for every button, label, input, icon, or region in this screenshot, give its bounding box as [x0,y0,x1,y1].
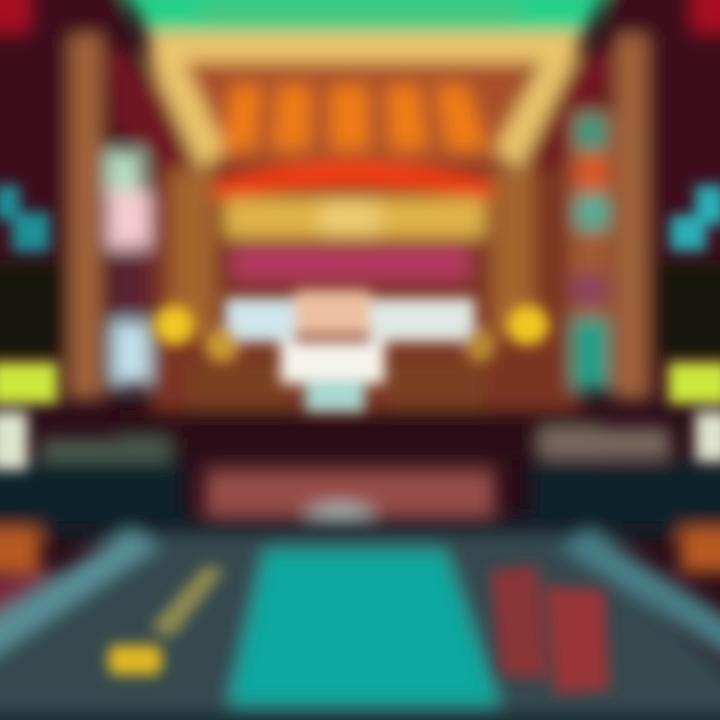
left lower diagonal rail [0,530,160,665]
yellow band [225,198,485,238]
red chip stacks [490,565,610,695]
right white block [695,412,720,462]
right teal ornament [670,185,720,251]
left wall [0,0,120,400]
ceiling orange stripes [222,85,488,150]
right slanted beam [535,50,615,175]
bottom left dark pink [0,570,60,625]
left panel light blue [112,320,150,385]
left slanted beam [105,50,185,175]
yellow floor marking [108,565,225,675]
floor lit spot [298,506,382,538]
yellow lamp right [507,305,549,345]
side sections back room [190,360,290,410]
pink floor [205,470,495,530]
right lime block [668,362,720,404]
yellow lamp left [154,305,194,345]
right wall [610,0,720,400]
right lower diagonal rail [560,530,720,665]
left table [0,462,185,522]
inner right column [492,170,534,335]
left table items [40,438,170,462]
right table items [540,428,670,458]
back room fill [150,40,580,440]
white centre back bar [225,290,475,412]
right table [530,462,720,522]
left lime block [0,362,58,404]
ceiling dark base [190,62,530,165]
teal pool [228,550,500,705]
inner left column [170,170,215,335]
right corner lower [680,528,720,573]
bottom strip [0,712,720,720]
ceiling yellow frame [145,32,585,170]
lower dark base [0,515,720,540]
magenta band [232,248,470,280]
left white block [0,412,28,470]
red arch [212,162,498,200]
yellow lamp inner left [204,327,240,363]
left panel white and pink [106,150,150,315]
left pillar [70,35,102,400]
grey floor [0,535,720,720]
left corner lower [0,528,40,573]
green ceiling band [118,0,612,32]
right pillar [615,35,647,400]
dark lower band [120,410,600,460]
left teal ornament [0,185,50,252]
yellow lamp inner right [464,327,496,363]
right panel stack [570,110,612,390]
